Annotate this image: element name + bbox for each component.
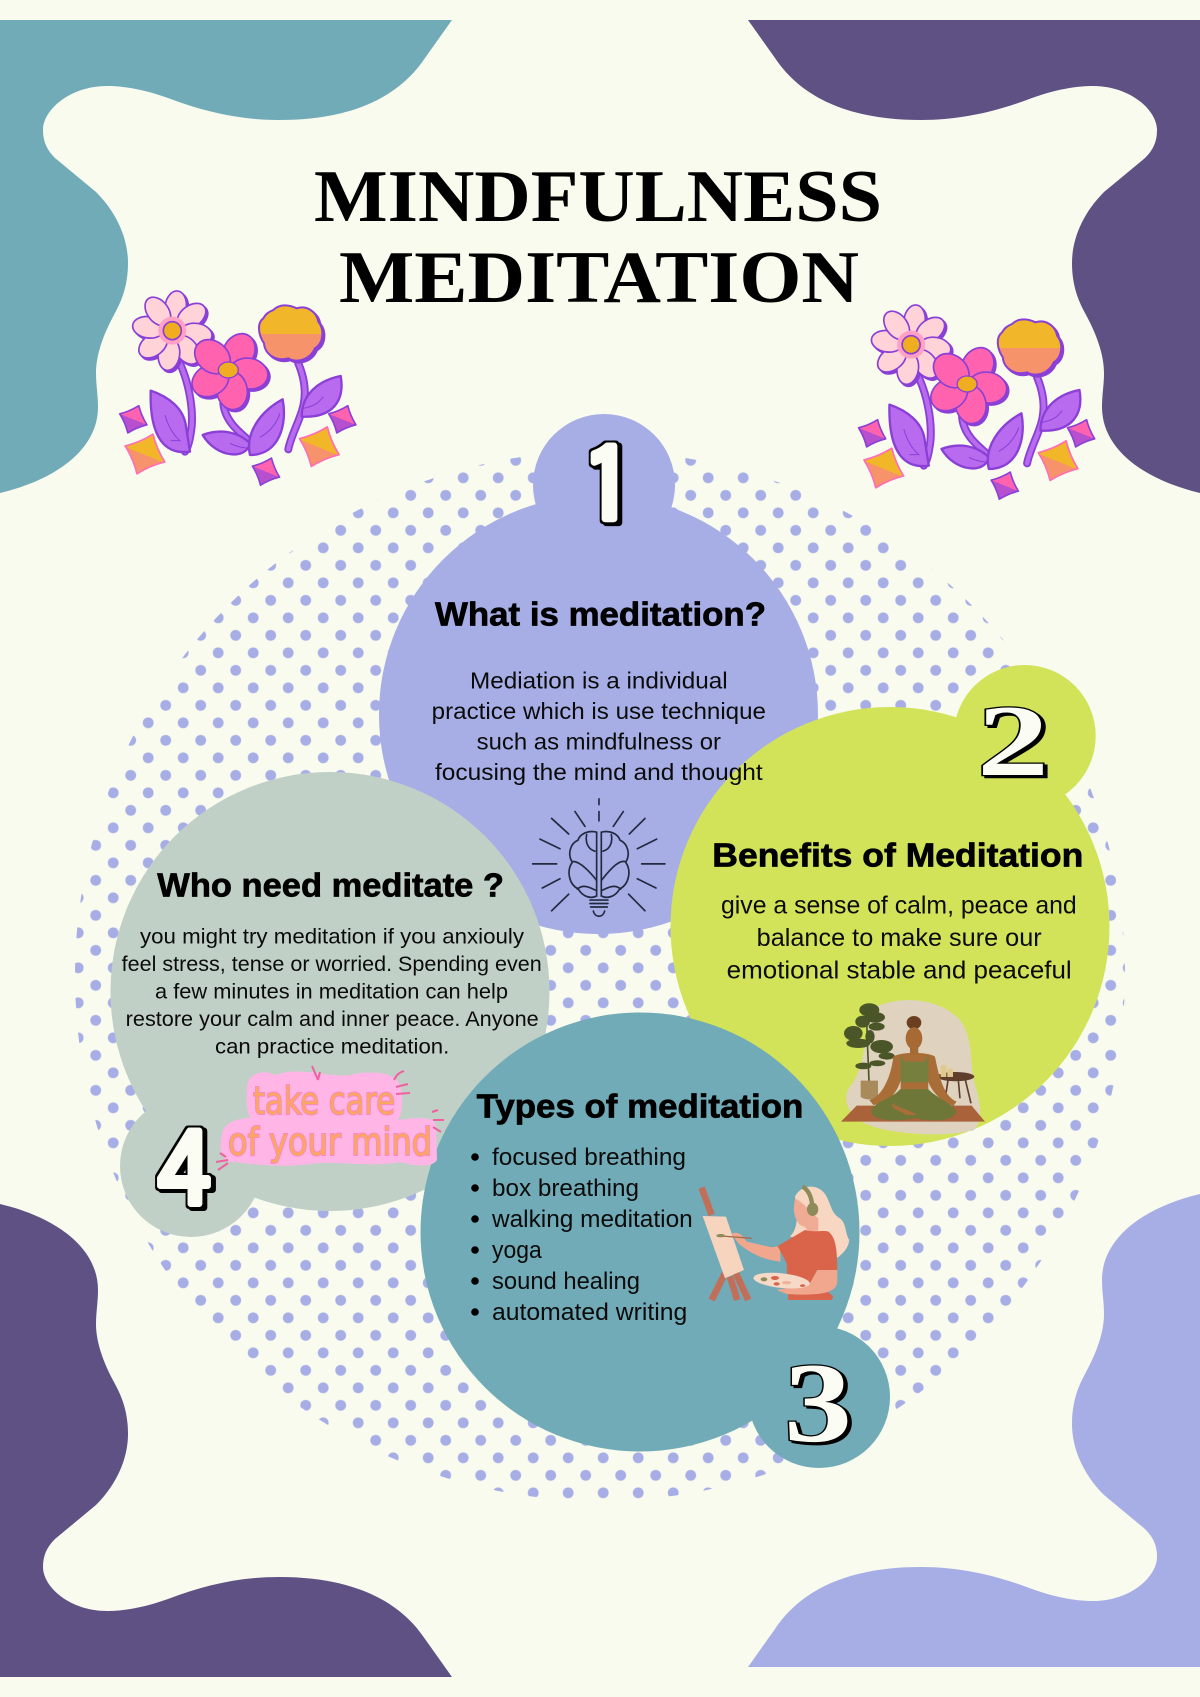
sticker: take care of your mind: of your mind <box>228 1120 432 1164</box>
text: what is meditation body: such as mindfulness or <box>477 728 721 754</box>
body text: balance to make sure our <box>757 924 1042 952</box>
panel: benefits of meditation <box>670 665 1110 1146</box>
body text: feel stress, tense or worried. Spending even <box>122 952 542 976</box>
number 3: 3 <box>784 1339 852 1466</box>
icon: flowers right <box>853 304 1100 505</box>
text: what is meditation body <box>432 668 766 785</box>
bullet list: automated writing <box>492 1299 687 1326</box>
body text <box>721 891 1077 985</box>
dotted circle background <box>75 451 1125 1501</box>
sticker: take care of your mind: take care <box>253 1079 395 1123</box>
number 2: 2 <box>977 685 1049 798</box>
corner blob: bottom left purple <box>0 1204 452 1677</box>
illustration: meditating woman <box>841 1000 985 1134</box>
bullet list: sound healing <box>492 1268 640 1295</box>
text: what is meditation body: practice which is use technique <box>432 698 766 724</box>
panel: types of meditation <box>420 1012 890 1468</box>
corner blob: top left teal <box>0 20 452 493</box>
body text <box>122 924 542 1059</box>
body text: give a sense of calm, peace and <box>721 891 1077 919</box>
panel: who need meditate <box>110 772 550 1237</box>
title <box>314 156 882 319</box>
number 4: 4 <box>158 1118 210 1222</box>
text: what is meditation body: Mediation is a individual <box>470 668 728 694</box>
icon: brain light bulb <box>533 799 665 916</box>
heading: Benefits of Meditation <box>712 837 1083 874</box>
number 1: 1 <box>582 433 634 537</box>
title: MEDITATION <box>339 237 859 319</box>
body text: you might try meditation if you anxiouly <box>140 924 524 948</box>
body text: a few minutes in meditation can help <box>155 980 508 1004</box>
bullet list: box breathing <box>492 1175 639 1202</box>
body text: can practice meditation. <box>215 1035 449 1059</box>
bullet list: walking meditation <box>491 1206 693 1233</box>
panel: what is meditation <box>379 414 818 934</box>
heading: Types of meditation <box>477 1087 803 1124</box>
heading: Who need meditate ? <box>157 867 504 904</box>
corner blob: bottom right periwinkle <box>748 1194 1200 1667</box>
bullet list <box>471 1144 693 1326</box>
bullet list: focused breathing <box>492 1144 686 1171</box>
text: what is meditation body: focusing the mind and thought <box>435 759 763 785</box>
title: MINDFULNESS <box>314 156 882 238</box>
corner blob: top right purple <box>748 20 1200 493</box>
body text: restore your calm and inner peace. Anyone <box>126 1007 539 1031</box>
illustration: painter <box>702 1187 849 1300</box>
icon: flowers left <box>114 290 361 491</box>
sticker: take care of your mind <box>216 1066 444 1170</box>
bullet list: yoga <box>492 1237 542 1264</box>
body text: emotional stable and peaceful <box>727 957 1072 985</box>
heading: What is meditation? <box>435 596 766 632</box>
